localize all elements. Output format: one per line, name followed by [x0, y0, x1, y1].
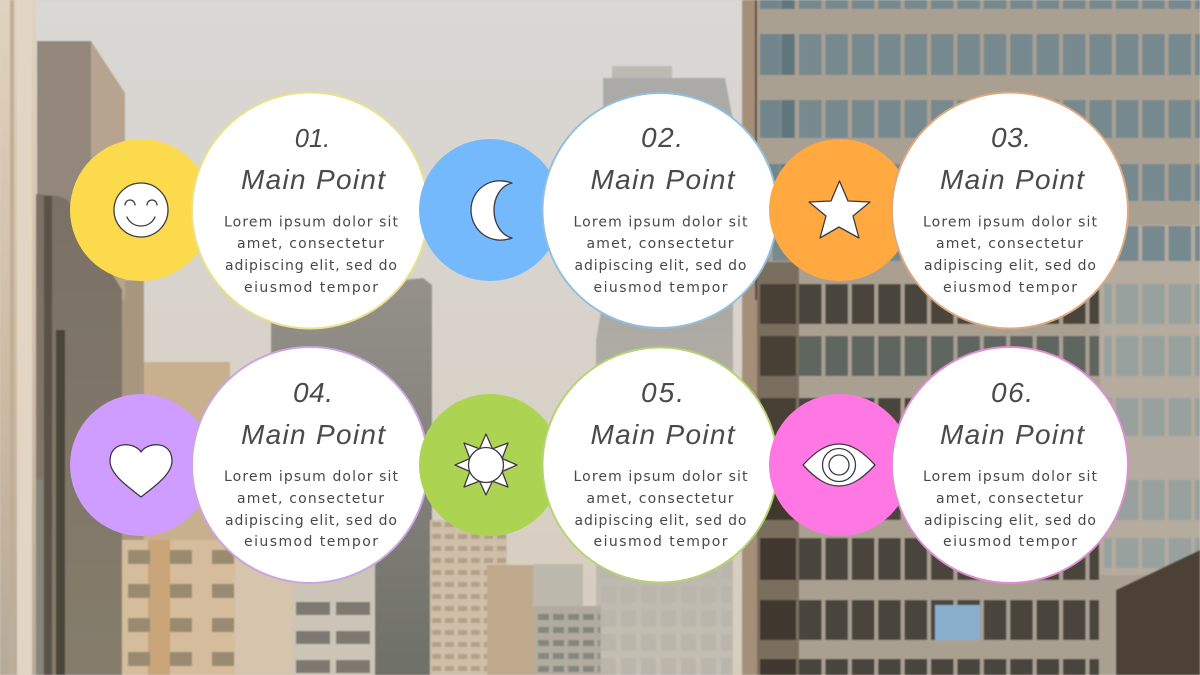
heading: Main Point — [241, 164, 386, 195]
body text: Lorem ipsum dolor sit — [923, 469, 1098, 485]
body text: amet, consectetur — [237, 236, 384, 252]
icon: star — [809, 181, 870, 238]
body text: amet, consectetur — [936, 491, 1083, 507]
panel: point 03 — [769, 92, 1128, 328]
body text: Lorem ipsum dolor sit — [224, 469, 398, 485]
icon disc: green — [419, 394, 561, 536]
body text — [574, 469, 748, 550]
number: 06. — [991, 377, 1033, 408]
panel: point 04 — [70, 347, 428, 583]
heading: Main Point — [241, 419, 386, 450]
body text: eiusmod tempor — [943, 534, 1077, 550]
number: 03. — [991, 122, 1031, 153]
left foreground column — [0, 0, 36, 675]
icon disc: purple — [70, 394, 212, 536]
content circle — [542, 93, 778, 328]
body text: Lorem ipsum dolor sit — [224, 214, 398, 230]
content circle — [192, 92, 428, 328]
icon disc: pink — [769, 394, 911, 536]
heading: Main Point — [590, 419, 736, 450]
body text — [923, 469, 1098, 550]
body text: eiusmod tempor — [244, 280, 378, 296]
small distant blocks — [487, 564, 601, 675]
panel: point 02 — [419, 93, 778, 328]
body text: Lorem ipsum dolor sit — [923, 214, 1098, 230]
body text: eiusmod tempor — [594, 534, 728, 550]
body text — [224, 469, 398, 550]
body text: Lorem ipsum dolor sit — [574, 214, 748, 230]
icon: sun — [455, 434, 517, 495]
icon: smiling face — [114, 183, 168, 237]
dark front building — [31, 194, 122, 675]
heading: Main Point — [940, 419, 1085, 450]
number: 04. — [293, 377, 333, 408]
body text: adipiscing elit, sed do — [574, 513, 746, 529]
icon: heart — [110, 445, 172, 497]
content circle — [892, 347, 1128, 583]
number: 02. — [641, 122, 683, 153]
heading: Main Point — [590, 164, 736, 195]
dark rooftop corner — [1116, 550, 1200, 675]
heading: Main Point — [940, 164, 1085, 195]
icon: crescent moon — [471, 181, 512, 240]
body text: amet, consectetur — [936, 236, 1083, 252]
body text: Lorem ipsum dolor sit — [574, 469, 748, 485]
content circle — [892, 92, 1128, 328]
body text — [574, 214, 748, 296]
distant pale tower — [596, 66, 733, 675]
body text: amet, consectetur — [237, 491, 384, 507]
body text: amet, consectetur — [586, 236, 734, 252]
panel: point 01 — [70, 92, 428, 328]
body text: amet, consectetur — [586, 491, 734, 507]
body text: adipiscing elit, sed do — [225, 258, 397, 274]
body text: adipiscing elit, sed do — [924, 258, 1096, 274]
content circle — [192, 347, 428, 583]
body text — [224, 214, 398, 296]
number: 01. — [295, 125, 330, 153]
body text — [923, 214, 1098, 296]
body text: adipiscing elit, sed do — [574, 258, 746, 274]
body text: eiusmod tempor — [594, 280, 728, 296]
icon disc: blue — [419, 139, 561, 281]
icon disc: orange — [769, 139, 911, 281]
body text: eiusmod tempor — [244, 534, 378, 550]
panel: point 05 — [419, 348, 778, 582]
large office building facade — [742, 0, 1200, 675]
number: 05. — [641, 377, 684, 408]
body text: eiusmod tempor — [943, 280, 1077, 296]
body text: adipiscing elit, sed do — [924, 513, 1096, 529]
icon disc: yellow — [70, 139, 212, 281]
low-rise block with windows — [292, 510, 375, 675]
tan apartment block — [120, 280, 292, 675]
content circle — [542, 348, 778, 582]
dark glass tower — [271, 278, 432, 675]
body text: adipiscing elit, sed do — [225, 513, 397, 529]
concrete tower — [37, 41, 125, 300]
panel: point 06 — [769, 347, 1128, 583]
icon: eye — [803, 444, 875, 486]
cream block — [430, 520, 507, 675]
